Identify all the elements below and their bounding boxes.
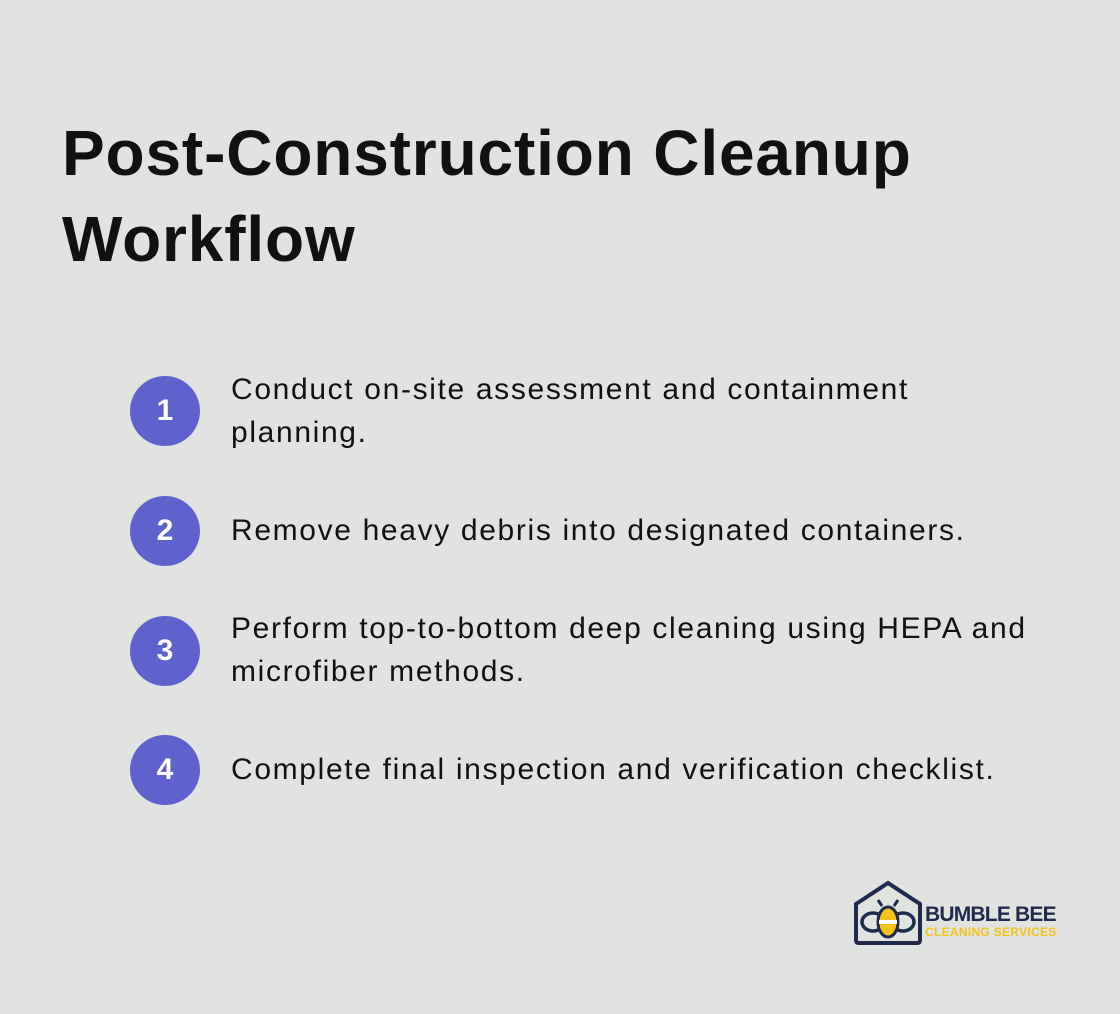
step 2 bbox=[130, 496, 966, 566]
text 1: planning. bbox=[231, 416, 368, 449]
text 1: Conduct on-site assessment and containment bbox=[231, 373, 909, 406]
title: Post-Construction Cleanup bbox=[62, 117, 912, 189]
number 3 bbox=[130, 616, 200, 686]
text 3: Perform top-to-bottom deep cleaning using HEPA and bbox=[231, 612, 1027, 645]
icon: bee house bbox=[854, 880, 922, 945]
logo text: BUMBLE BEE bbox=[925, 903, 1056, 926]
text 4: Complete final inspection and verification checklist. bbox=[231, 753, 995, 786]
number 2: 2 bbox=[157, 514, 173, 547]
text 2: Remove heavy debris into designated containers. bbox=[231, 514, 966, 547]
number 3: 3 bbox=[157, 634, 173, 667]
number 4: 4 bbox=[157, 753, 173, 786]
number 2 bbox=[130, 496, 200, 566]
logo bbox=[854, 880, 1057, 945]
logo text bbox=[925, 903, 1057, 939]
step 1 bbox=[130, 373, 909, 449]
step 4 bbox=[130, 735, 995, 805]
number 4 bbox=[130, 735, 200, 805]
title bbox=[62, 117, 912, 275]
text 3: microfiber methods. bbox=[231, 655, 526, 688]
logo text: CLEANING SERVICES bbox=[925, 925, 1057, 939]
title: Workflow bbox=[62, 203, 356, 275]
number 1 bbox=[130, 376, 200, 446]
text 1 bbox=[231, 373, 909, 449]
step 3 bbox=[130, 612, 1027, 688]
number 1: 1 bbox=[157, 394, 173, 427]
text 3 bbox=[231, 612, 1027, 688]
